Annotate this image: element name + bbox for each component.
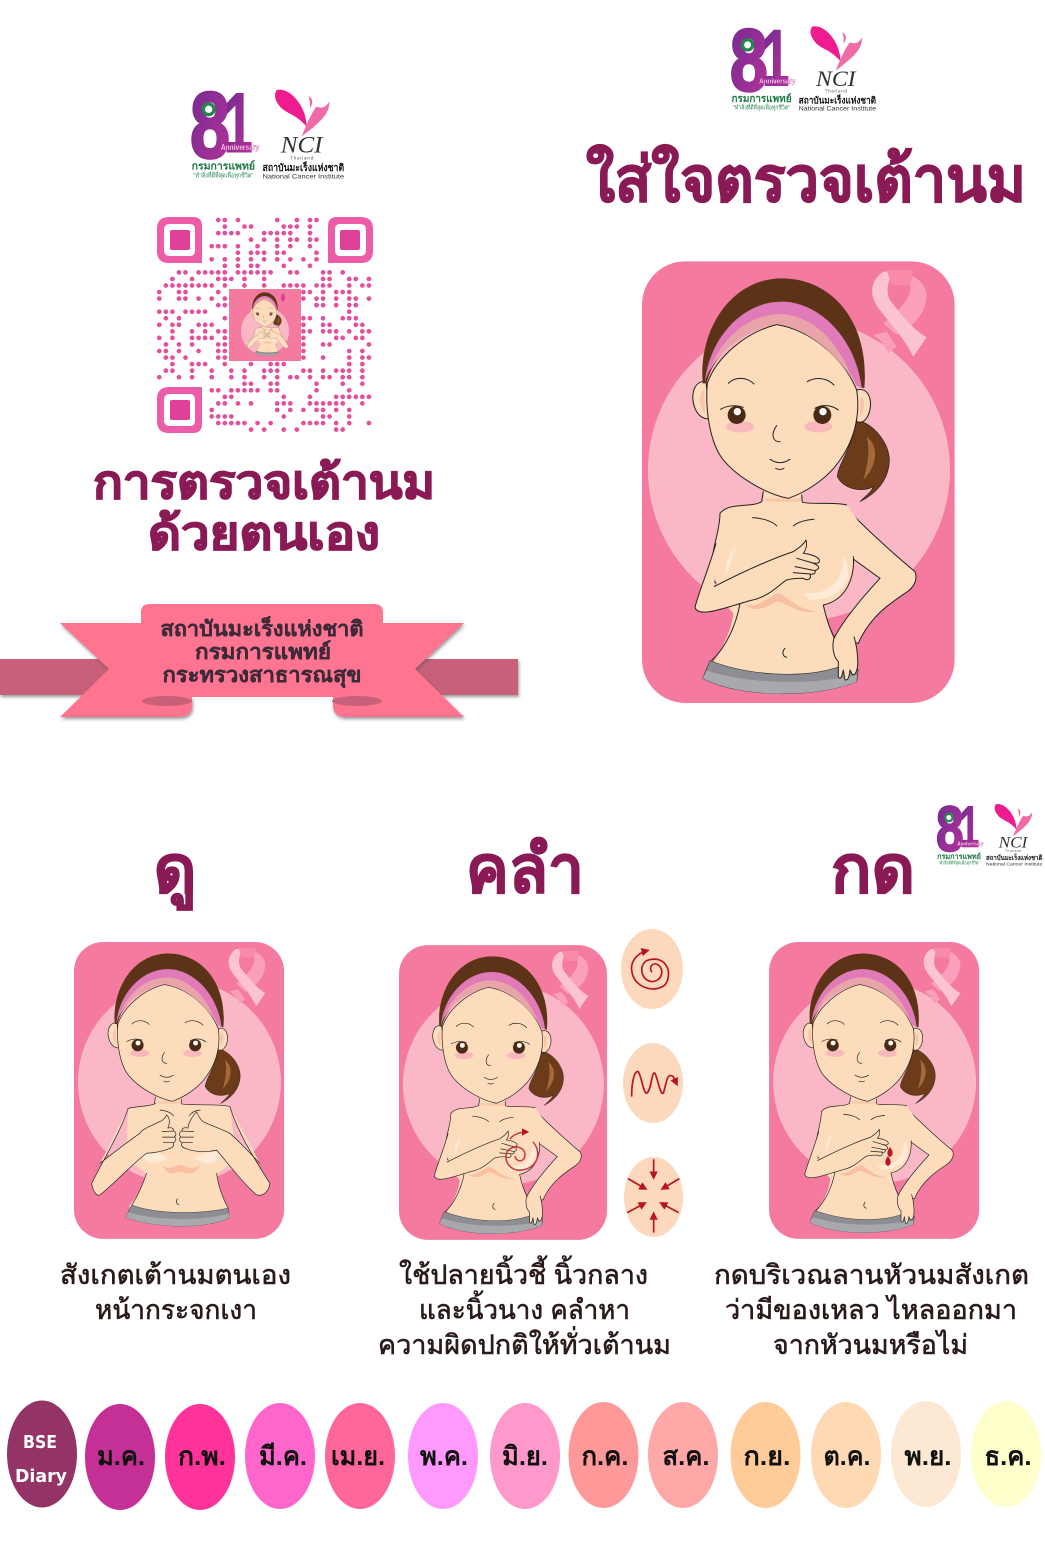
ribbon banner [0, 604, 518, 717]
logo: department and cancer institute, left column: "ทำสิ่งที่ดีที่สุดเพื่อทุกชีวิต" [193, 170, 254, 179]
ribbon banner: กรมการแพทย์ [195, 640, 331, 664]
month: January: ม.ค. [97, 1441, 145, 1471]
month: April: เม.ย. [331, 1441, 385, 1471]
logo: department and cancer institute, lower right: 8 [936, 793, 964, 865]
month: May: พ.ค. [420, 1441, 468, 1471]
panel: palpate illustration [399, 945, 607, 1240]
logo: department and cancer institute, left column: Anniversary [221, 143, 260, 152]
logo: department and cancer institute, lower right: Thailand [1005, 849, 1021, 853]
logo: department and cancer institute, top right: 1 [762, 13, 789, 102]
panel: look illustration [74, 942, 284, 1239]
caption: press: ว่ามีของเหลว ไหลออกมา [725, 1295, 1017, 1325]
logo: department and cancer institute, left column: 1 [224, 77, 252, 170]
logo: department and cancer institute, top right: "ทำสิ่งที่ดีที่สุดเพื่อทุกชีวิต" [733, 102, 790, 111]
month: BSE Diary label: BSE [23, 1432, 57, 1453]
caption: look: สังเกตเต้านมตนเอง [60, 1260, 291, 1290]
logo: department and cancer institute, top right: National Cancer Institute [799, 106, 877, 113]
logo: department and cancer institute, left column: 8 [190, 74, 230, 178]
caption: palpate: ความผิดปกติให้ทั่วเต้านม [378, 1326, 671, 1360]
ribbon banner: สถาบันมะเร็งแห่งชาติ [160, 615, 364, 641]
heading: self breast exam: การตรวจเต้านม [93, 456, 435, 508]
logo: department and cancer institute, top right [730, 11, 877, 113]
caption: palpate [378, 1255, 671, 1360]
month: August [648, 1402, 718, 1508]
logo: department and cancer institute, lower right: กรมการแพทย์ [937, 852, 981, 861]
month: August: ส.ค. [662, 1441, 710, 1471]
month: July [568, 1402, 638, 1508]
logo: department and cancer institute, top right: Anniversary [759, 76, 796, 85]
icon: inward pressing [624, 1157, 683, 1237]
ribbon banner: กระทรวงสาธารณสุข [162, 664, 362, 689]
heading: self breast exam [93, 456, 435, 559]
panel: press illustration [769, 942, 979, 1239]
logo: department and cancer institute, top right: 8 [730, 11, 768, 110]
month: December [971, 1401, 1041, 1507]
icon: circular motion [621, 929, 683, 1009]
month: September [730, 1402, 800, 1508]
month: October: ต.ค. [824, 1441, 870, 1471]
icon: zigzag motion [623, 1043, 683, 1123]
month: January [85, 1404, 155, 1510]
heading: press: กด [831, 832, 915, 906]
logo: department and cancer institute, lower right [936, 793, 1043, 866]
logo: department and cancer institute, lower right: "ทำสิ่งที่ดีที่สุดเพื่อทุกชีวิต" [938, 859, 980, 866]
logo: department and cancer institute, top right: สถาบันมะเร็งแห่งชาติ [799, 93, 876, 106]
logo: department and cancer institute, left column [190, 74, 344, 181]
caption: press [714, 1260, 1029, 1360]
caption: palpate: ใช้ปลายนิ้วชี้ นิ้วกลาง [399, 1255, 648, 1290]
heading: self breast exam: ด้วยตนเอง [148, 507, 380, 559]
month: March: มี.ค. [259, 1441, 307, 1471]
month: June: มิ.ย. [502, 1441, 548, 1471]
month: September: ก.ย. [744, 1441, 790, 1471]
month: December: ธ.ค. [984, 1441, 1032, 1471]
caption: press: จากหัวนมหรือไม่ [773, 1330, 968, 1360]
logo: department and cancer institute, left column: สถาบันมะเร็งแห่งชาติ [262, 160, 344, 174]
logo: department and cancer institute, top right: Thailand [825, 88, 847, 93]
month: July: ก.ค. [582, 1441, 628, 1471]
main title: ใส่ใจตรวจเต้านม [586, 144, 1026, 215]
month: February [165, 1404, 235, 1510]
logo: department and cancer institute, lower right: Anniversary [957, 842, 984, 848]
month: March [245, 1403, 315, 1509]
month: February: ก.พ. [178, 1441, 226, 1471]
month: April [325, 1403, 395, 1509]
month: June [490, 1403, 560, 1509]
logo: department and cancer institute, lower right: National Cancer Institute [986, 861, 1043, 866]
logo: department and cancer institute, left column: Thailand [290, 155, 314, 160]
month: BSE Diary label: Diary [15, 1466, 67, 1487]
logo: department and cancer institute, left column: National Cancer Institute [262, 174, 344, 181]
monthly diary strip [7, 1400, 1041, 1510]
logo: department and cancer institute, left column: กรมการแพทย์ [192, 159, 255, 172]
heading: palpate: คลำ [466, 832, 584, 906]
logo: department and cancer institute, lower right: NCI [998, 834, 1028, 851]
month: November [891, 1401, 961, 1507]
month: October [811, 1402, 881, 1508]
month: BSE Diary label [7, 1400, 77, 1508]
logo: department and cancer institute, lower right: 1 [960, 796, 979, 860]
QR code [157, 217, 373, 433]
logo: department and cancer institute, top right: กรมการแพทย์ [732, 93, 792, 105]
caption: press: กดบริเวณลานหัวนมสังเกต [714, 1260, 1029, 1290]
caption: look: หน้ากระจกเงา [95, 1295, 257, 1325]
heading: look: ดู [154, 832, 196, 911]
main illustration: woman checking breast [642, 261, 955, 703]
caption: palpate: และนิ้วนาง คลำหา [419, 1290, 630, 1325]
month: May [408, 1403, 478, 1509]
caption: look [60, 1260, 291, 1325]
logo: department and cancer institute, top right: NCI [815, 66, 857, 91]
month: November: พ.ย. [904, 1441, 952, 1471]
logo: department and cancer institute, left column: NCI [280, 133, 324, 159]
